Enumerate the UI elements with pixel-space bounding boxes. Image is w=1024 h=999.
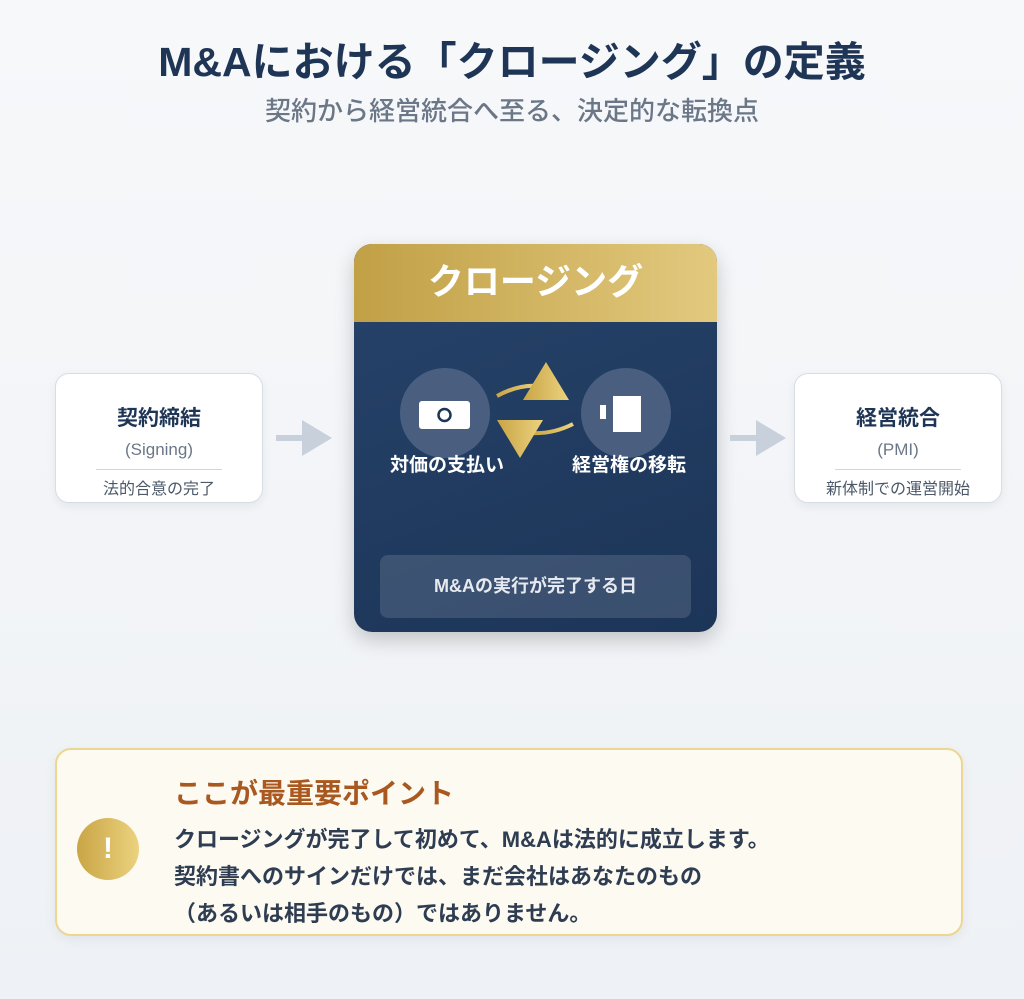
callout text	[174, 827, 770, 926]
callout heading: ここが最重要ポイント	[174, 778, 454, 809]
arrow: left	[276, 420, 332, 456]
panel: PMI: (PMI)	[877, 440, 919, 459]
arrow: right	[730, 420, 786, 456]
callout text: （あるいは相手のもの）ではありません。	[174, 901, 591, 926]
callout text: 契約書へのサインだけでは、まだ会社はあなたのもの	[174, 864, 702, 889]
closing header	[354, 244, 717, 322]
closing header: クロージング	[428, 261, 643, 302]
closing date box: M&Aの実行が完了する日	[434, 576, 637, 596]
panel: PMI: 新体制での運営開始	[826, 481, 970, 498]
icon: exclamation	[77, 818, 139, 880]
closing date box	[380, 555, 691, 618]
panel: PMI	[794, 373, 1002, 503]
label: transfer: 経営権の移転	[572, 455, 686, 476]
icon: transfer	[581, 368, 671, 458]
icon: exclamation: !	[103, 832, 113, 865]
icon: exchange arrows	[496, 362, 574, 458]
panel: signing	[55, 373, 263, 503]
panel: signing: 法的合意の完了	[103, 481, 215, 498]
panel: PMI: 経営統合	[856, 407, 940, 430]
callout text: クロージングが完了して初めて、M&Aは法的に成立します。	[174, 827, 770, 852]
callout: key point	[55, 748, 963, 936]
title: M&Aにおける「クロージング」の定義	[158, 39, 866, 85]
icon: payment	[400, 368, 490, 458]
label: payment: 対価の支払い	[390, 455, 504, 476]
panel: signing: (Signing)	[125, 440, 193, 459]
subtitle: 契約から経営統合へ至る、決定的な転換点	[265, 96, 759, 126]
panel: closing	[354, 244, 717, 632]
panel: signing: 契約締結	[117, 407, 201, 430]
